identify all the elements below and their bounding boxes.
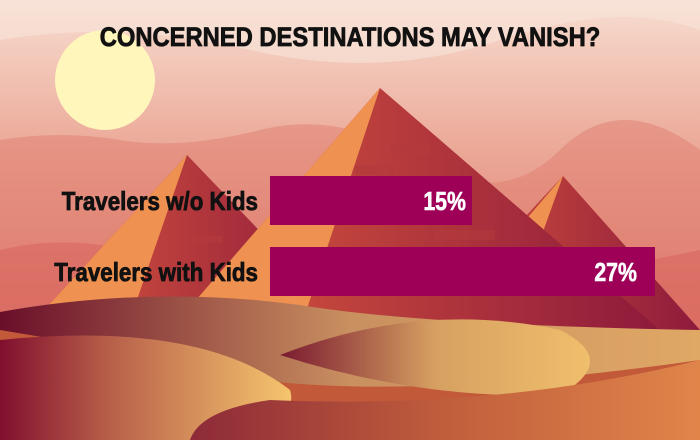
value: 15%: 15% xyxy=(423,187,466,217)
value: 27%: 27% xyxy=(594,258,637,288)
dunes xyxy=(0,296,700,440)
title: CONCERNED DESTINATIONS MAY VANISH? xyxy=(100,23,600,52)
bar chart xyxy=(54,176,655,296)
pyramids xyxy=(35,88,700,330)
bar: 15% xyxy=(270,176,472,225)
bar: 27% xyxy=(270,247,655,296)
icon: sun xyxy=(55,30,155,130)
label: travelers w/o kids: Travelers w/o Kids xyxy=(62,187,258,216)
label: travelers with kids: Travelers with Kids xyxy=(54,258,258,287)
